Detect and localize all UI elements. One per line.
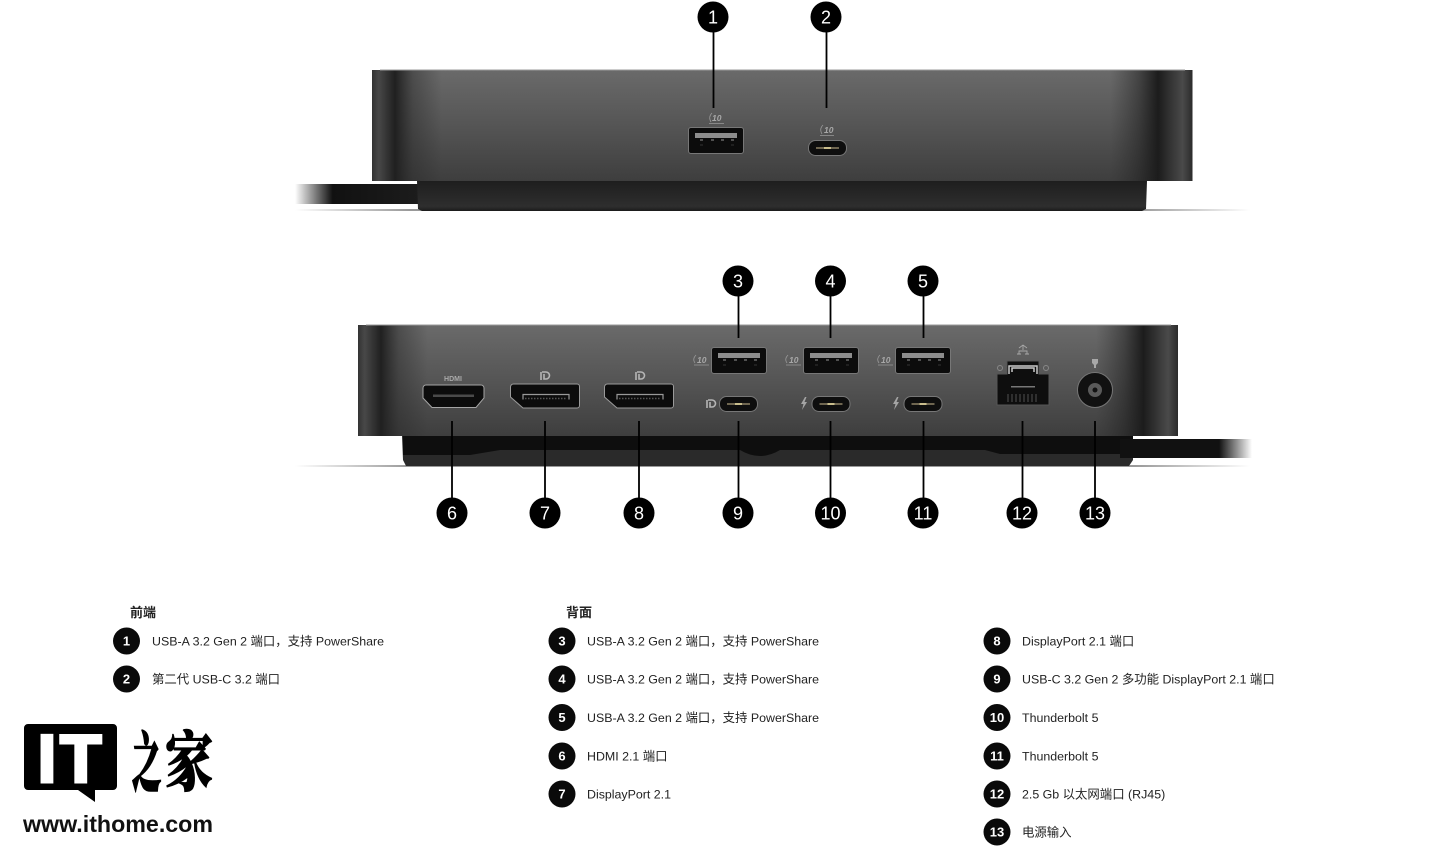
logo: IT home	[22, 711, 213, 837]
callout 5	[908, 266, 938, 296]
rear base	[402, 436, 1133, 466]
legend item 10: Thunderbolt 5	[1022, 711, 1099, 725]
callout 7	[530, 498, 560, 528]
legend item 8	[984, 628, 1134, 654]
callout 3	[722, 266, 754, 296]
callout 13: 13	[1085, 504, 1105, 524]
DisplayPort 1	[510, 372, 580, 408]
legend item 6: 6	[558, 748, 566, 764]
rear body	[358, 324, 1178, 436]
legend item 2	[113, 666, 280, 692]
legend item 12: 2.5 Gb 以太网端口 (RJ45)	[1022, 786, 1165, 802]
USB-A port 3	[694, 348, 766, 374]
callout 6: 6	[447, 504, 457, 524]
logo speech bubble	[24, 724, 117, 802]
legend item 9: 9	[993, 672, 1001, 686]
legend item 11: Thunderbolt 5	[1022, 750, 1099, 764]
callout 6	[436, 498, 468, 528]
legend item 10	[984, 704, 1099, 731]
DisplayPort 2	[604, 372, 674, 408]
front ground shadow	[295, 209, 1250, 211]
legend item 10: 10	[990, 710, 1004, 725]
callout 12: 12	[1012, 504, 1032, 524]
panel: front view of dock	[295, 70, 1250, 211]
logo T letter: T	[60, 721, 102, 797]
RJ45 port	[997, 345, 1049, 405]
USB-C port 9	[707, 396, 758, 412]
legend item 2: 2	[123, 672, 130, 686]
HDMI port	[423, 376, 484, 408]
legend item 4	[548, 666, 819, 692]
legend item 13	[984, 818, 1072, 846]
legend item 5: 5	[558, 710, 566, 725]
USB-A port 4: 10	[789, 355, 799, 365]
legend item 11: 11	[990, 748, 1004, 764]
heading: rear: 背面	[566, 605, 592, 620]
legend item 12: 12	[990, 786, 1004, 802]
callout 10: 10	[820, 504, 841, 524]
callout 2: 2	[821, 8, 831, 28]
legend item 8: 8	[993, 634, 1001, 648]
logo IT letters: I	[38, 721, 56, 797]
logo Chinese wordmark second character: 家	[165, 711, 213, 804]
legend item 3: USB-A 3.2 Gen 2 端口，支持 PowerShare	[587, 634, 819, 648]
legend item 3	[548, 628, 819, 654]
callout 7: 7	[540, 504, 550, 524]
front USB-C port: 10	[824, 125, 834, 135]
callout 11	[908, 498, 938, 528]
legend item 9	[984, 666, 1275, 692]
legend item 7: 7	[558, 786, 566, 802]
legend item 9: USB-C 3.2 Gen 2 多功能 DisplayPort 2.1 端口	[1022, 672, 1275, 686]
front base	[417, 181, 1147, 211]
legend item 1	[113, 628, 384, 654]
front USB-A port: 10	[712, 113, 722, 123]
power input	[1078, 359, 1112, 408]
logo Chinese wordmark: 之	[132, 713, 161, 805]
front USB-C port	[808, 125, 846, 156]
legend item 4: 4	[558, 672, 566, 686]
legend: rear column 2	[984, 628, 1275, 846]
callout 9	[722, 498, 754, 528]
USB-A port 3: 10	[697, 355, 707, 365]
callout 4: 4	[825, 272, 836, 292]
legend: front	[113, 605, 384, 692]
legend item 6: HDMI 2.1 端口	[587, 750, 668, 764]
callout 8	[624, 498, 654, 528]
legend item 5: USB-A 3.2 Gen 2 端口，支持 PowerShare	[587, 710, 819, 725]
legend item 8: DisplayPort 2.1 端口	[1022, 634, 1134, 648]
legend item 7	[548, 780, 671, 808]
callout 1: 1	[708, 8, 718, 28]
legend: rear column 1	[548, 605, 819, 808]
legend item 1: USB-A 3.2 Gen 2 端口，支持 PowerShare	[152, 634, 384, 648]
legend item 6	[548, 742, 668, 770]
USB-A port 5	[878, 348, 950, 374]
legend item 13: 电源输入	[1022, 824, 1072, 840]
USB-A port 5: 10	[881, 355, 891, 365]
USB-A port 4	[786, 348, 858, 374]
callout 13	[1080, 498, 1110, 528]
legend item 4: USB-A 3.2 Gen 2 端口，支持 PowerShare	[587, 672, 819, 686]
callout lines	[452, 30, 1095, 498]
callout 9: 9	[733, 504, 743, 524]
heading: front: 前端	[130, 605, 156, 620]
front body	[372, 70, 1192, 181]
rear ground shadow	[295, 465, 1250, 467]
panel: rear view of dock	[295, 324, 1252, 467]
legend item 1: 1	[123, 634, 130, 648]
front USB-A port	[688, 113, 744, 154]
callout 1	[698, 2, 728, 32]
callout 11: 11	[914, 504, 932, 524]
callout 4	[815, 266, 846, 296]
legend item 7: DisplayPort 2.1	[587, 788, 671, 802]
HDMI port: HDMI	[444, 376, 462, 383]
USB-C port 10	[801, 396, 850, 412]
callout 10	[815, 498, 846, 528]
front power cable	[295, 184, 420, 204]
callout 5: 5	[918, 272, 928, 292]
legend item 12	[984, 780, 1165, 808]
legend item 13: 13	[990, 824, 1004, 840]
callout 2	[810, 2, 842, 32]
callout 3: 3	[733, 272, 743, 292]
logo URL: www.ithome.com	[22, 811, 213, 837]
legend item 2: 第二代 USB-C 3.2 端口	[152, 672, 280, 686]
rear power cable	[403, 436, 1252, 458]
legend item 11	[984, 742, 1099, 770]
USB-C port 11	[893, 396, 942, 412]
legend item 3: 3	[558, 634, 566, 648]
callout 8: 8	[634, 504, 644, 524]
legend item 5	[548, 704, 819, 731]
callout 12	[1006, 498, 1038, 528]
